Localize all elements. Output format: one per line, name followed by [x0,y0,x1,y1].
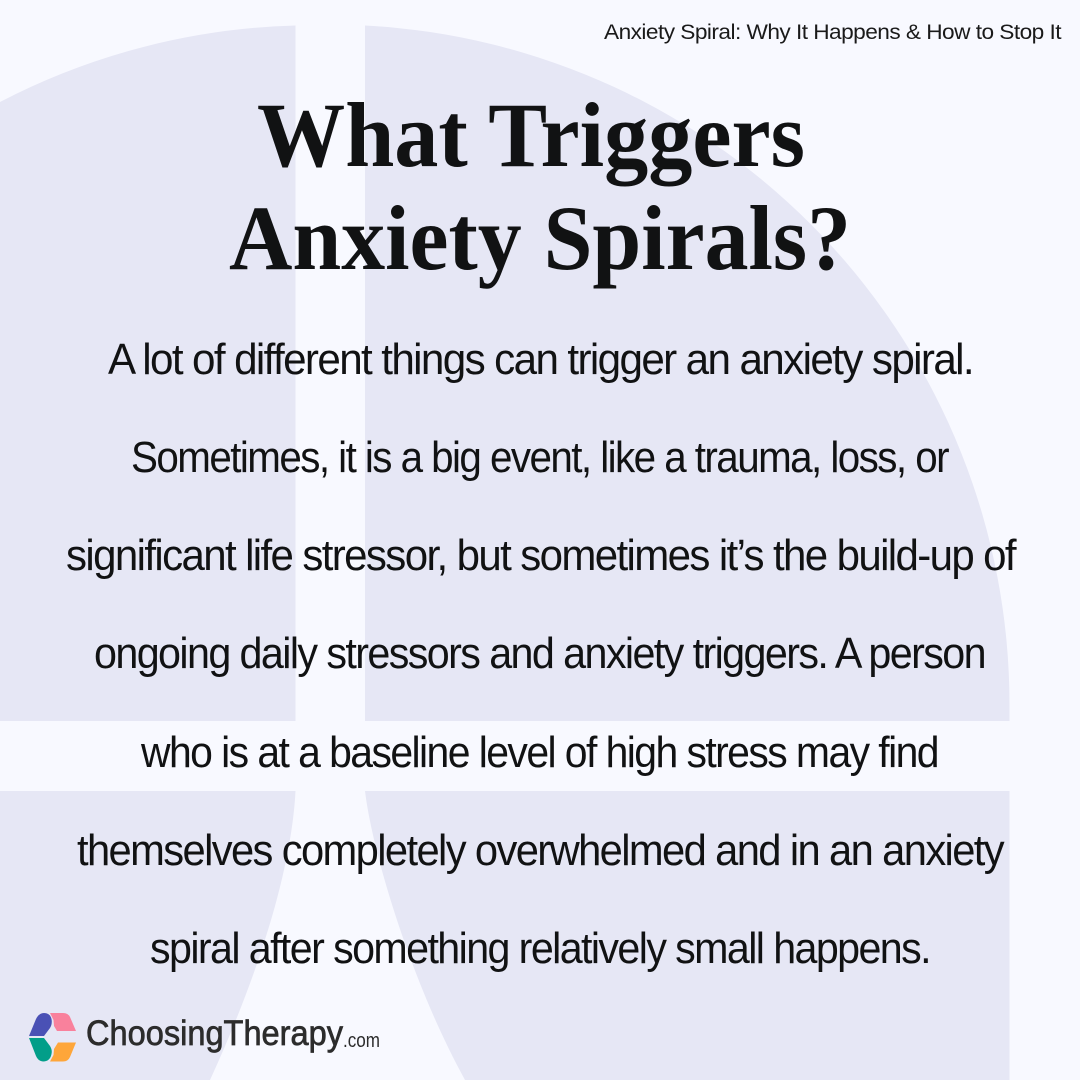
header source title: Anxiety Spiral: Why It Happens & How to Stop It [604,21,1062,44]
logo: ChoosingTherapy.com [29,1013,380,1062]
body paragraph: spiral after something relatively small happens. [150,924,930,973]
body paragraph [66,335,1017,973]
heading: What Triggers [257,84,805,186]
body paragraph: Sometimes, it is a big event, like a trauma, loss, or [131,433,949,482]
body paragraph: significant life stressor, but sometimes it’s the build-up of [66,531,1017,580]
logo wordmark: ChoosingTherapy [86,1014,343,1053]
icon: four-petal logo mark [29,1013,76,1062]
body paragraph: who is at a baseline level of high stress may find [140,728,938,777]
heading [229,84,851,289]
body paragraph: themselves completely overwhelmed and in an anxiety [77,826,1005,875]
heading: Anxiety Spirals? [229,187,851,289]
body paragraph: ongoing daily stressors and anxiety triggers. A person [94,629,985,678]
body paragraph: A lot of different things can trigger an anxiety spiral. [108,335,973,384]
logo suffix: .com [343,1030,380,1052]
